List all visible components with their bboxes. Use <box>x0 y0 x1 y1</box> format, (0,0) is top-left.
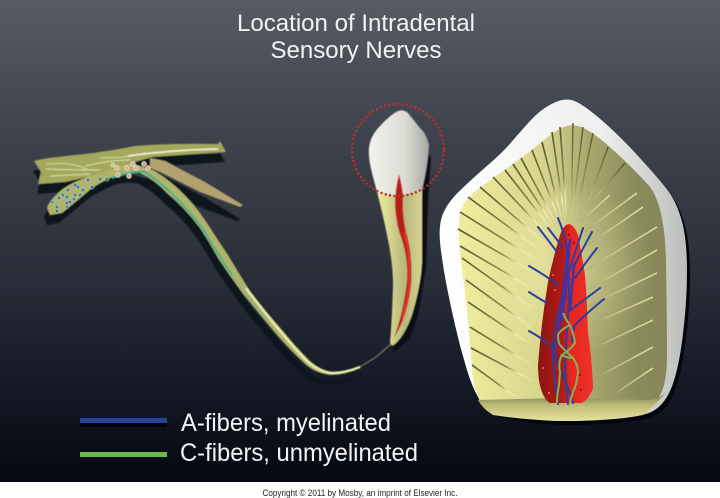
legend <box>80 409 418 467</box>
title: Location of Intradental <box>237 10 475 37</box>
crown <box>369 110 429 195</box>
blue fibre dots <box>50 177 109 213</box>
pulp cell dots <box>542 274 556 394</box>
root <box>377 190 422 346</box>
dentinal tubules, top right <box>571 123 625 220</box>
upper bundle <box>34 141 226 184</box>
copyright line: Copyright © 2011 by Mosby, an imprint of Elsevier Inc. <box>262 488 458 498</box>
small whole tooth <box>369 110 431 351</box>
bundle shadows <box>33 151 357 385</box>
unmyelinated C-fibers <box>557 313 578 403</box>
legend: C-fibers <box>80 439 418 467</box>
enlarged tooth section <box>440 100 690 425</box>
thin nerve to the apex <box>360 344 391 367</box>
green and teal fibre core <box>112 172 232 275</box>
tan branch <box>150 158 243 207</box>
legend: A-fibers: A-fibers, myelinated <box>181 409 391 437</box>
title <box>237 10 475 64</box>
dentinal tubules, left and upper <box>458 127 567 400</box>
root canal pulp <box>394 174 411 338</box>
pink fibre rings <box>111 162 150 178</box>
glow around pulp <box>476 180 656 360</box>
base band <box>478 392 666 421</box>
pulp chamber <box>538 224 593 403</box>
nerve bundle illustration <box>33 141 391 385</box>
dotted red magnifier circle <box>352 104 444 196</box>
legend: C-fibers: C-fibers, unmyelinated <box>180 439 418 467</box>
shadow <box>443 104 690 425</box>
myelinated A-fibers <box>529 218 604 404</box>
pale distal nerve <box>246 288 360 373</box>
dentin <box>459 125 667 419</box>
lower lobe and main nerve <box>47 163 360 375</box>
legend: A-fibers <box>80 409 391 437</box>
pale dentinal tubules, right <box>580 193 657 397</box>
enamel <box>440 100 687 421</box>
tooth shadow <box>392 150 431 351</box>
title: Sensory Nerves <box>270 37 442 64</box>
